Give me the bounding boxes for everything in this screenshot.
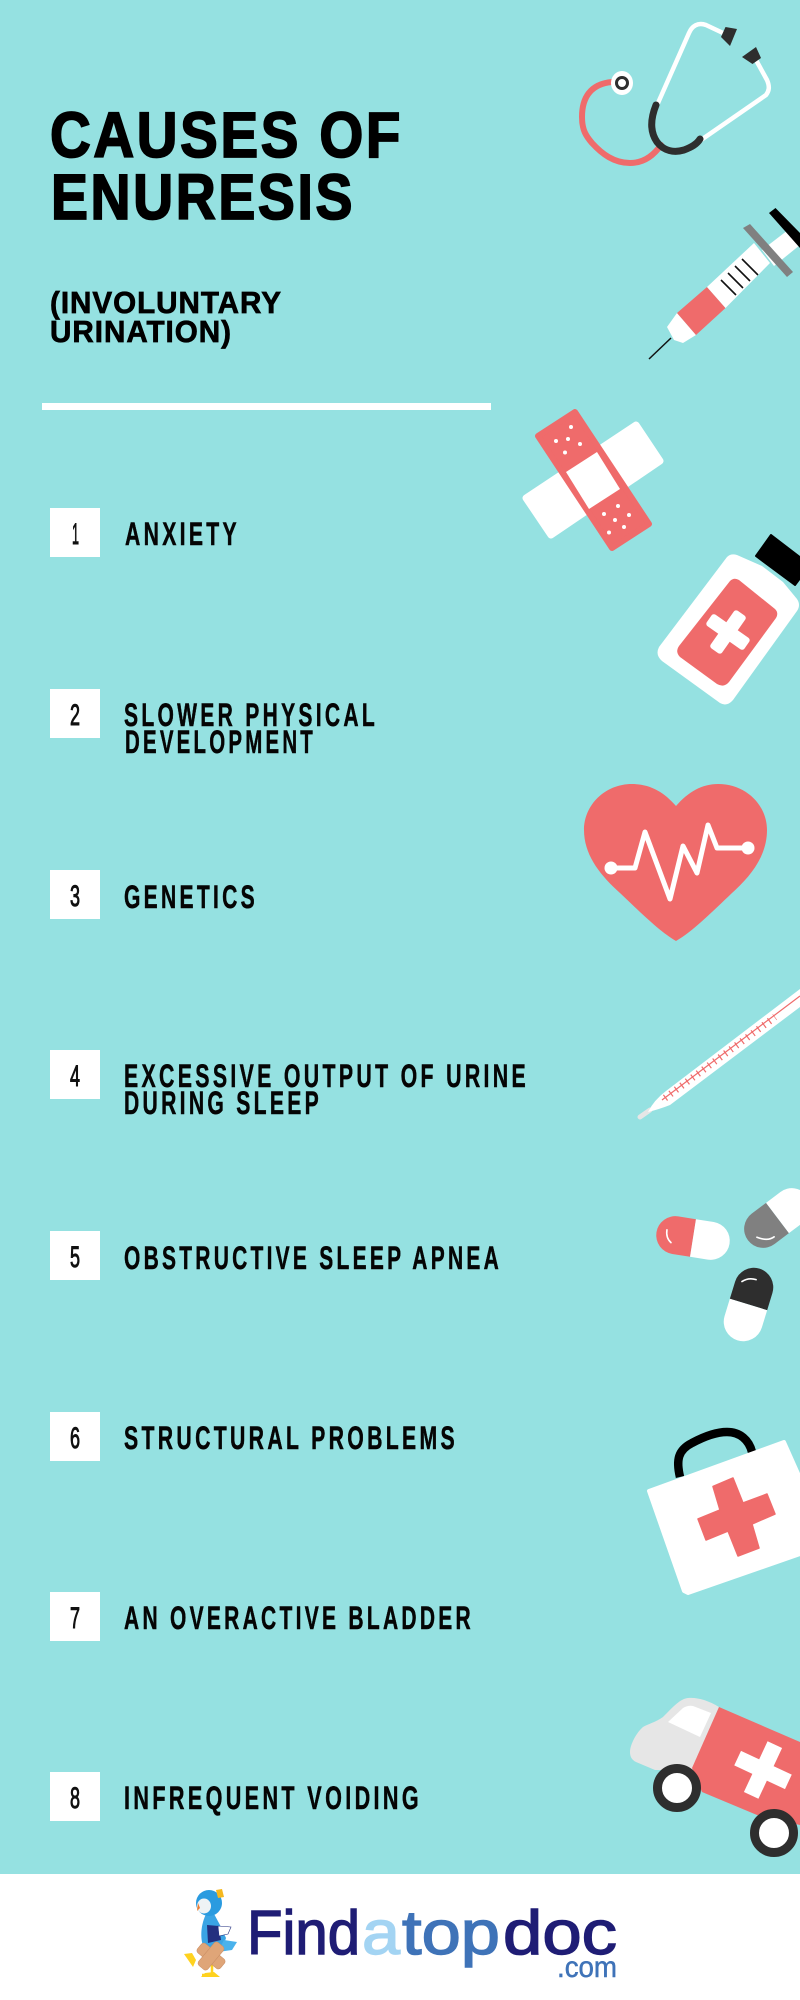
list item 7: 7: [70, 1602, 80, 1635]
list item 8: INFREQUENT VOIDING: [124, 1780, 422, 1816]
list item 2: SLOWER PHYSICAL: [124, 697, 378, 733]
title: [50, 99, 403, 233]
list item 1: ANXIETY: [125, 516, 240, 552]
list item 1: 1: [72, 518, 79, 551]
list item 7: [50, 1592, 474, 1641]
icon: adhesive bandage: [526, 412, 660, 548]
icon: first aid kit: [649, 1432, 800, 1593]
list item 4: 4: [70, 1060, 80, 1093]
logo wordmark: Find: [247, 1899, 360, 1968]
footer band: [0, 1874, 800, 2000]
icon: ambulance: [630, 1698, 800, 1852]
icon: pink capsule: [653, 1213, 733, 1263]
list item 6: [50, 1412, 458, 1461]
icon: syringe: [649, 208, 800, 359]
logo mascot: bird: [184, 1889, 237, 1977]
logo wordmark: top: [402, 1899, 500, 1968]
icon: medicine bottle: [658, 535, 800, 704]
subtitle: URINATION): [50, 315, 232, 349]
icon: thermometer: [640, 989, 800, 1117]
list item 4: [50, 1050, 529, 1121]
list item 2: DEVELOPMENT: [125, 724, 316, 760]
icon: heart with pulse: [584, 784, 767, 941]
list item 6: 6: [70, 1422, 80, 1455]
list item 5: 5: [70, 1241, 80, 1274]
list item 5: OBSTRUCTIVE SLEEP APNEA: [124, 1240, 502, 1276]
title divider: [42, 403, 491, 410]
icon: grey capsule: [737, 1181, 800, 1255]
title: ENURESIS: [51, 161, 355, 233]
list item 4: EXCESSIVE OUTPUT OF URINE: [124, 1058, 529, 1094]
list item 7: AN OVERACTIVE BLADDER: [124, 1600, 474, 1636]
list item 8: 8: [70, 1782, 80, 1815]
logo wordmark: .com: [557, 1951, 617, 1984]
list item 1: [50, 508, 240, 557]
list item 2: [50, 689, 378, 760]
icon: stethoscope: [582, 24, 769, 163]
list item 6: STRUCTURAL PROBLEMS: [124, 1420, 458, 1456]
title: CAUSES OF: [50, 99, 403, 171]
subtitle: (INVOLUNTARY: [50, 286, 282, 320]
list item 8: [50, 1772, 422, 1821]
icon: black capsule: [719, 1263, 778, 1346]
list item 5: [50, 1231, 502, 1280]
list item 3: [50, 870, 258, 919]
list item 3: GENETICS: [124, 879, 258, 915]
logo wordmark: [247, 1899, 617, 1984]
logo wordmark: doc: [503, 1899, 617, 1968]
list item 2: 2: [70, 699, 80, 732]
list item 4: DURING SLEEP: [124, 1085, 322, 1121]
list item 3: 3: [70, 880, 80, 913]
logo wordmark: a: [362, 1899, 401, 1968]
subtitle: [50, 286, 282, 349]
